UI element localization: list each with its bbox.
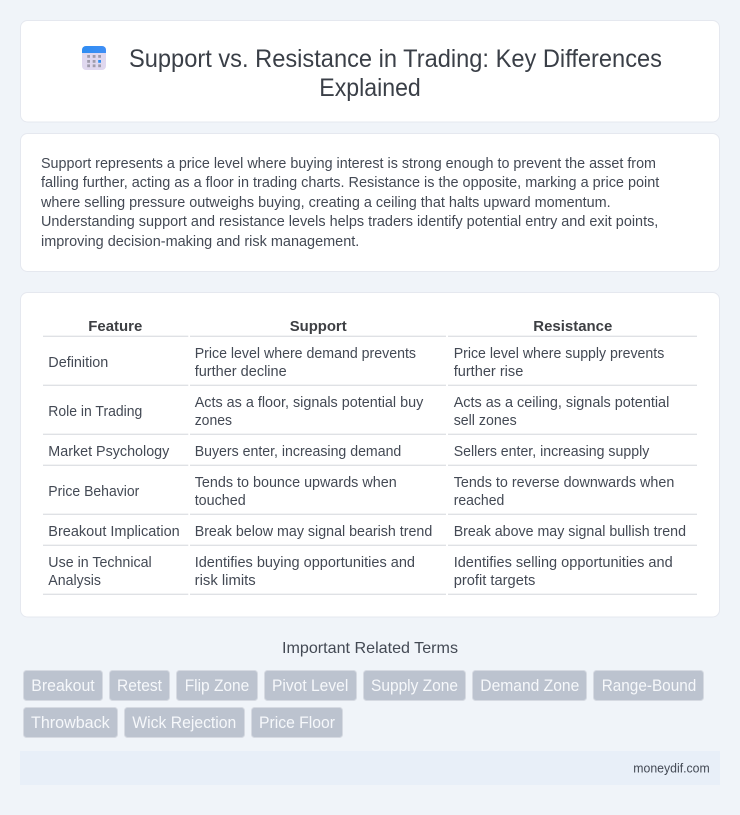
row: Use in Technical Analysis: profit targets [454,573,535,589]
title [129,45,662,102]
tag: Wick Rejection [124,708,244,738]
tag: Range-Bound: Range-Bound [602,676,696,695]
footer: source: moneydif.com [633,760,710,775]
row: Breakout Implication: Break below may signal bearish trend [195,524,432,540]
tag: Supply Zone: Supply Zone [371,676,458,695]
tag: Breakout [24,670,102,700]
row: Price Behavior: touched [195,493,246,509]
text block: description: improving decision-making and risk management. [41,233,359,250]
row: Breakout Implication: Break above may signal bullish trend [454,524,686,540]
row: Role in Trading: Acts as a ceiling, signals potential [454,395,669,411]
panel: comparison table [20,292,720,617]
row: Price Behavior: Tends to bounce upwards when [195,475,397,491]
tag: Flip Zone [176,670,258,700]
row: Market Psychology: Market Psychology [48,444,170,460]
tag: Wick Rejection: Wick Rejection [132,713,236,732]
row: Market Psychology: Buyers enter, increasing demand [195,444,401,460]
tag: Throwback [24,708,118,738]
row: Definition: Price level where supply prevents [454,346,664,362]
related term tags [24,670,704,738]
text block: description: falling further, acting as a floor in trading charts. Resistance is the opposite, marking a price point [41,174,660,191]
row: Use in Technical Analysis: Identifies buying opportunities and [195,555,415,571]
panel: title card [20,20,720,122]
row: Use in Technical Analysis: Analysis [48,573,101,589]
table header: Resistance [533,318,612,335]
tag: Breakout: Breakout [31,676,95,695]
icon: calendar [82,46,106,70]
text block: description [40,155,660,250]
tag: Supply Zone [364,670,466,700]
text block: description: Understanding support and resistance levels helps traders identify potential entry and exit points, [41,213,658,230]
row: Market Psychology: Sellers enter, increasing supply [454,444,650,460]
tag: Retest [110,670,170,700]
row: Definition [48,346,664,380]
row: Role in Trading: Role in Trading [48,404,142,420]
tag: Demand Zone [472,670,586,700]
panel: description [20,134,720,272]
table header: Support [290,318,347,335]
tag: Demand Zone: Demand Zone [480,676,579,695]
table header: Feature [88,318,142,335]
table header [88,318,612,335]
row: Price Behavior: Price Behavior [48,484,139,500]
row: Use in Technical Analysis: risk limits [195,573,256,589]
row: Use in Technical Analysis: Identifies selling opportunities and [454,555,673,571]
row: Role in Trading: sell zones [454,413,517,429]
row: Price Behavior: reached [454,493,504,509]
tag: Price Floor [252,708,342,738]
row: Role in Trading: Acts as a floor, signals potential buy [195,395,424,411]
row: Role in Trading [48,395,669,429]
row: Role in Trading: zones [195,413,232,429]
footer [20,751,720,785]
tag: Flip Zone: Flip Zone [185,676,249,695]
row: Definition: further decline [195,364,287,380]
row: Market Psychology [48,444,650,460]
tag: Pivot Level: Pivot Level [272,676,348,695]
heading: related terms: Important Related Terms [282,640,458,657]
row: Definition: Definition [48,355,108,371]
tag: Pivot Level [264,670,356,700]
row: Breakout Implication: Breakout Implication [48,524,180,540]
text block: description: Support represents a price level where buying interest is strong enough to prevent the asset from [41,155,656,172]
row: Use in Technical Analysis [48,555,673,589]
row: Definition: further rise [454,364,523,380]
row: Use in Technical Analysis: Use in Technical [48,555,152,571]
tag: Retest: Retest [117,676,162,695]
row: Price Behavior [48,475,674,509]
text block: description: where selling pressure outweighs buying, creating a ceiling that halts upward momentum. [40,194,611,211]
row: Breakout Implication [48,524,686,540]
row: Price Behavior: Tends to reverse downwards when [454,475,674,491]
title: Explained [319,74,421,102]
tag: Throwback: Throwback [31,713,110,732]
row: Definition: Price level where demand prevents [195,346,416,362]
tag: Price Floor: Price Floor [259,713,335,732]
tag: Range-Bound [594,670,704,700]
title: Support vs. Resistance in Trading: Key Differences [129,45,662,73]
